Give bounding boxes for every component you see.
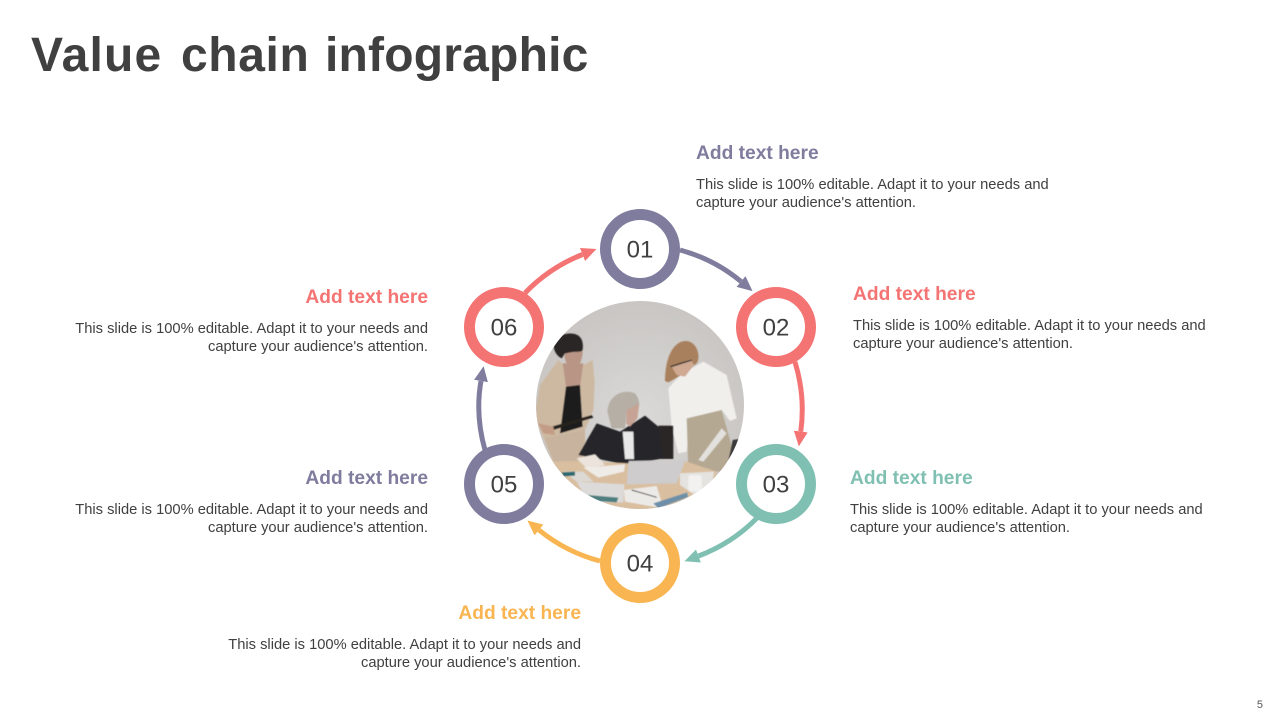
text block 05: Add text here [305, 468, 428, 489]
text block 04 [228, 603, 581, 671]
node 05: 05 [491, 472, 517, 498]
arrow: 03 to 04 [698, 518, 757, 556]
text block 01: This slide is 100% editable. Adapt it to your needs and [696, 177, 1049, 193]
text block 02: This slide is 100% editable. Adapt it to your needs and [853, 318, 1206, 334]
text block 03: Add text here [850, 468, 973, 489]
text block 06: capture your audience's attention. [208, 339, 428, 355]
left woman [536, 360, 595, 463]
node 03: 03 [763, 472, 789, 498]
photo: three businesswomen at a desk [536, 301, 744, 509]
title [31, 29, 589, 82]
arrow: 05 to 06 [479, 381, 485, 450]
text block 06 [75, 287, 428, 355]
text block 04: capture your audience's attention. [361, 655, 581, 671]
title: chain [181, 29, 309, 82]
node 01: 01 [627, 236, 653, 264]
table and papers [554, 461, 717, 509]
text block 05: capture your audience's attention. [208, 520, 428, 536]
page number: 5 [1257, 699, 1263, 711]
arrow: 06 to 01 [525, 254, 582, 293]
node 05 [470, 450, 538, 518]
text block 01: Add text here [696, 143, 819, 164]
title: infographic [325, 29, 589, 82]
text block 02: capture your audience's attention. [853, 336, 1073, 352]
text block 03: capture your audience's attention. [850, 520, 1070, 536]
node 03 [742, 450, 810, 518]
node 04: 04 [627, 550, 653, 578]
text block 02: Add text here [853, 284, 976, 305]
text block 02 [853, 284, 1206, 352]
title: Value [31, 29, 162, 82]
node 02 [742, 292, 810, 362]
diagram: value chain cycle [464, 209, 816, 603]
arrow: 01 to 02 [680, 250, 741, 282]
node 06: 06 [491, 314, 517, 342]
text block 04: This slide is 100% editable. Adapt it to your needs and [228, 637, 581, 653]
text block 01: capture your audience's attention. [696, 195, 916, 211]
text block 06: Add text here [305, 287, 428, 308]
node 02: 02 [763, 314, 789, 342]
arrow: 04 to 05 [539, 530, 600, 561]
right woman [668, 362, 737, 453]
text block 04: Add text here [458, 603, 581, 624]
text block 03: This slide is 100% editable. Adapt it to your needs and [850, 502, 1203, 518]
text block 01 [696, 143, 1049, 211]
text block 05 [75, 468, 428, 536]
node 06 [470, 292, 538, 362]
node 01 [606, 214, 674, 284]
text block 03 [850, 468, 1203, 536]
text block 06: This slide is 100% editable. Adapt it to your needs and [75, 321, 428, 337]
text block 05: This slide is 100% editable. Adapt it to your needs and [75, 502, 428, 518]
arrow: 02 to 03 [795, 362, 802, 432]
seated woman [658, 426, 673, 459]
node 04 [606, 528, 674, 598]
